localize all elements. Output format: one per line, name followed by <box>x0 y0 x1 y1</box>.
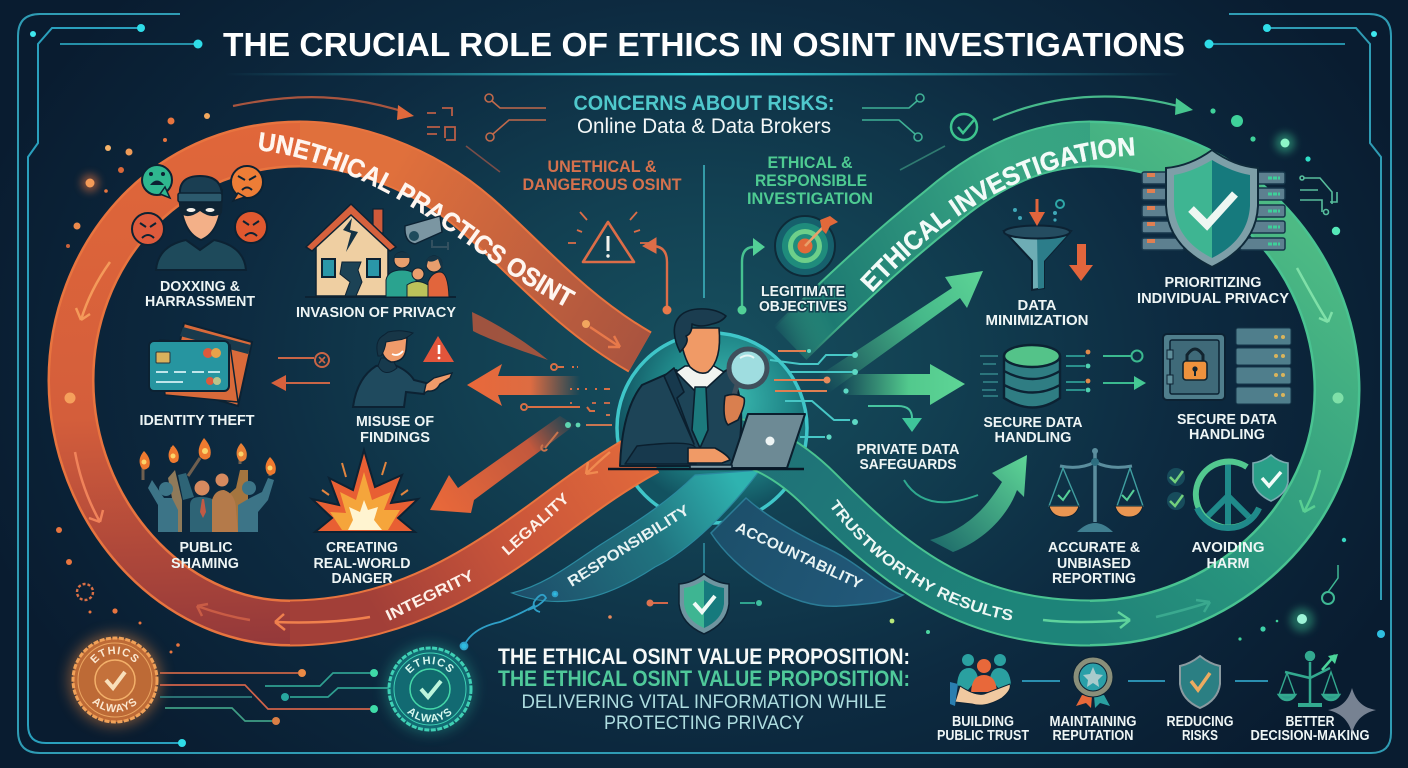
arrow: private data safeguards <box>868 406 922 432</box>
label: creating real-world danger: REAL-WORLD <box>314 556 410 572</box>
label: secure data handling right: HANDLING <box>1189 427 1265 443</box>
holding hand <box>724 394 744 425</box>
hub: teal circle behind investigator <box>617 333 807 523</box>
particles: orange dots <box>56 113 210 654</box>
icon: database <box>980 345 1090 408</box>
arc under safeguards <box>904 480 978 502</box>
connector dash <box>1022 680 1060 682</box>
torso and suit <box>620 370 741 466</box>
emoji: angry red right <box>235 211 267 243</box>
label: accurate and unbiased reporting <box>1048 540 1141 587</box>
label: doxxing and harrassment <box>145 279 255 310</box>
heading: value proposition: PROTECTING PRIVACY <box>604 712 804 734</box>
circuit traces between badges <box>160 669 390 725</box>
heading: ethical and responsible investigation: INVESTIGATION <box>747 189 873 208</box>
heading: concerns about risks <box>574 91 834 138</box>
label: misuse of findings: MISUSE OF <box>356 414 434 430</box>
label: secure data handling left: HANDLING <box>994 430 1072 446</box>
connector dash <box>1235 680 1268 682</box>
label: invasion of privacy: INVASION OF PRIVACY <box>296 305 456 321</box>
arrow: orange wedge toward center <box>472 312 548 360</box>
circuit: top right <box>862 94 924 141</box>
label: building public trust <box>937 714 1029 744</box>
ribbon label: integrity: INTEGRITY <box>383 567 478 625</box>
label: maintaining reputation: MAINTAINING <box>1050 714 1136 730</box>
icon: scales of justice <box>1049 448 1143 532</box>
icon: avoiding harm peace sign with shield <box>1167 455 1288 528</box>
ribbon: accountability: ACCOUNTABILITY <box>733 519 865 593</box>
label: maintaining reputation: REPUTATION <box>1052 728 1134 744</box>
label: public shaming: PUBLIC <box>180 540 233 556</box>
ribbon: unethical loop (orange) <box>48 120 660 646</box>
label: data minimization: DATA <box>1018 298 1057 314</box>
ribbon: ethical loop (green) <box>742 120 1360 646</box>
icon: building public trust <box>950 654 1011 706</box>
badge: ethics always teal <box>380 638 480 740</box>
label: misuse of findings: FINDINGS <box>360 430 430 446</box>
ribbon: responsibility <box>512 470 760 602</box>
icon: bottom center shield <box>646 543 762 634</box>
connector dash <box>1128 680 1165 682</box>
heading: unethical and dangerous osint: DANGEROUS OSINT <box>522 175 682 194</box>
label: creating real-world danger: CREATING <box>326 540 398 556</box>
arrows: identity theft connectors <box>271 353 330 391</box>
label: prioritizing individual privacy: PRIORITIZING <box>1164 275 1262 291</box>
heading: ethical and responsible investigation: RESPONSIBLE <box>755 171 867 190</box>
label: prioritizing individual privacy <box>1137 275 1289 307</box>
particles: green dots <box>608 108 1346 641</box>
label: private data safeguards: SAFEGUARDS <box>860 457 957 473</box>
circuit glyph: green top <box>1300 176 1337 214</box>
label: public shaming: SHAMING <box>171 556 239 572</box>
heading: concerns about risks: CONCERNS ABOUT RISKS: <box>574 91 834 115</box>
label: better decision-making: DECISION-MAKING <box>1250 728 1370 744</box>
label: building public trust: PUBLIC TRUST <box>937 728 1029 744</box>
label: doxxing and harrassment: DOXXING & <box>160 279 241 295</box>
heading: ethical and responsible investigation: ETHICAL & <box>768 153 852 172</box>
head <box>680 328 720 373</box>
label: secure data handling right <box>1177 412 1278 443</box>
icon: reducing risks <box>1180 656 1220 708</box>
label: avoiding harm: AVOIDING <box>1192 540 1264 556</box>
icon: doxxing person <box>132 165 267 270</box>
label: legitimate objectives: OBJECTIVES <box>759 299 847 315</box>
ribbon: accountability <box>711 498 903 606</box>
icon: real-world danger explosion <box>312 450 418 532</box>
label: avoiding harm <box>1192 540 1264 572</box>
heading: concerns about risks: Online Data & Data Brokers <box>577 115 831 138</box>
family <box>386 270 416 297</box>
icon: invasion of privacy house <box>305 204 456 297</box>
emoji: angry red left <box>132 213 164 245</box>
circuit: top left <box>485 94 546 141</box>
label: doxxing and harrassment: HARRASSMENT <box>145 294 255 310</box>
label: secure data handling right: SECURE DATA <box>1177 412 1278 428</box>
label: avoiding harm: HARM <box>1206 556 1250 572</box>
circuit traces: right of investigator <box>770 349 858 440</box>
arrow: green middle <box>835 364 965 405</box>
label: misuse of findings <box>356 414 434 446</box>
emoji: worried green <box>142 165 172 198</box>
desk line <box>608 468 804 470</box>
divider: center vertical <box>703 165 705 298</box>
icon: better decision-making <box>1279 652 1339 705</box>
heading: value proposition: THE ETHICAL OSINT VALUE PROPOSITION: <box>498 666 910 691</box>
arrow: green lower curved <box>930 455 1027 552</box>
label: private data safeguards <box>856 442 960 473</box>
label: accurate and unbiased reporting: UNBIASED <box>1057 556 1131 572</box>
arrow: orange left <box>467 364 580 406</box>
badge: ethics always teal: ETHICS <box>404 656 454 674</box>
arrows: secure data connectors <box>1103 350 1146 390</box>
icon: target with arrow <box>738 216 838 314</box>
circuit traces: left of investigator <box>521 364 612 451</box>
label: legitimate objectives: LEGITIMATE <box>761 284 845 300</box>
icon: identity theft cards <box>149 323 252 406</box>
circuit glyph: orange top <box>427 108 455 140</box>
decorative streaks <box>466 146 945 172</box>
ribbon label: legality: LEGALITY <box>499 490 573 559</box>
label: prioritizing individual privacy: INDIVIDUAL PRIVACY <box>1137 291 1289 307</box>
heading: unethical and dangerous osint: UNETHICAL & <box>548 157 656 176</box>
icon: warning triangle with arrow <box>568 212 672 314</box>
label: secure data handling left <box>984 415 1083 446</box>
heading: value proposition: THE ETHICAL OSINT VALUE PROPOSITION: <box>498 644 910 669</box>
label: identity theft: IDENTITY THEFT <box>140 413 255 429</box>
label: better decision-making: BETTER <box>1286 714 1335 730</box>
ribbon label: ethical investigation: ETHICAL INVESTIGATION <box>860 137 1134 292</box>
label: legitimate objectives <box>759 284 847 315</box>
typing arm <box>625 443 696 464</box>
badge: ethics always orange: ALWAYS <box>92 698 136 712</box>
label: private data safeguards: PRIVATE DATA <box>856 442 960 458</box>
heading: value proposition <box>498 644 910 734</box>
arrow: orange lower-left <box>430 416 575 513</box>
label: reducing risks <box>1166 714 1234 744</box>
icon: check circle top <box>951 114 977 140</box>
arc arrow: top orange <box>233 97 414 120</box>
icon: safe with padlock and servers <box>1163 328 1291 404</box>
heading: value proposition: DELIVERING VITAL INFORMATION WHILE <box>522 691 886 713</box>
label: creating real-world danger <box>314 540 410 587</box>
emoji: angry orange <box>231 166 263 201</box>
icon: public shaming crowd <box>140 438 276 532</box>
heading: unethical and dangerous osint <box>522 157 682 194</box>
badge: ethics always orange: ETHICS <box>90 646 139 664</box>
investigator figure <box>608 309 805 469</box>
icon: maintaining reputation <box>1073 657 1113 708</box>
label: maintaining reputation <box>1050 714 1136 744</box>
label: accurate and unbiased reporting: REPORTING <box>1052 571 1136 587</box>
badge: ethics always orange <box>60 625 170 735</box>
magnifying glass <box>729 349 767 387</box>
icon: data minimization funnel <box>1004 199 1093 290</box>
label: reducing risks: REDUCING <box>1166 714 1234 730</box>
label: data minimization <box>986 298 1088 329</box>
decorative: blue connector <box>460 592 557 650</box>
label: secure data handling left: SECURE DATA <box>984 415 1083 431</box>
label: creating real-world danger: DANGER <box>332 571 393 587</box>
label: data minimization: MINIMIZATION <box>986 313 1088 329</box>
laptop <box>730 414 805 468</box>
label: building public trust: BUILDING <box>952 714 1014 730</box>
label: reducing risks: RISKS <box>1182 728 1218 744</box>
badge: ethics always teal: ALWAYS <box>406 708 452 722</box>
title: THE CRUCIAL ROLE OF ETHICS IN OSINT INVESTIGATIONS <box>223 27 1185 64</box>
arrow: green upper-right <box>815 271 983 392</box>
label: better decision-making <box>1250 714 1370 744</box>
icon: privacy shield with servers <box>1142 150 1285 267</box>
arc arrow: top green <box>993 97 1193 120</box>
heading: ethical and responsible investigation <box>747 153 873 208</box>
icon: misuse of findings person <box>353 331 454 407</box>
ribbon label: unethical practics osint: UNETHICAL PRACTICS OSINT <box>259 132 576 306</box>
icon: sparkle watermark <box>1328 688 1376 733</box>
label: public shaming <box>171 540 239 572</box>
ribbon label: trustworthy results: TRUSTWORTHY RESULTS <box>831 499 1013 620</box>
label: accurate and unbiased reporting: ACCURATE & <box>1048 540 1141 556</box>
ribbon: responsibility: RESPONSIBILITY <box>565 502 692 590</box>
security camera <box>405 216 442 244</box>
